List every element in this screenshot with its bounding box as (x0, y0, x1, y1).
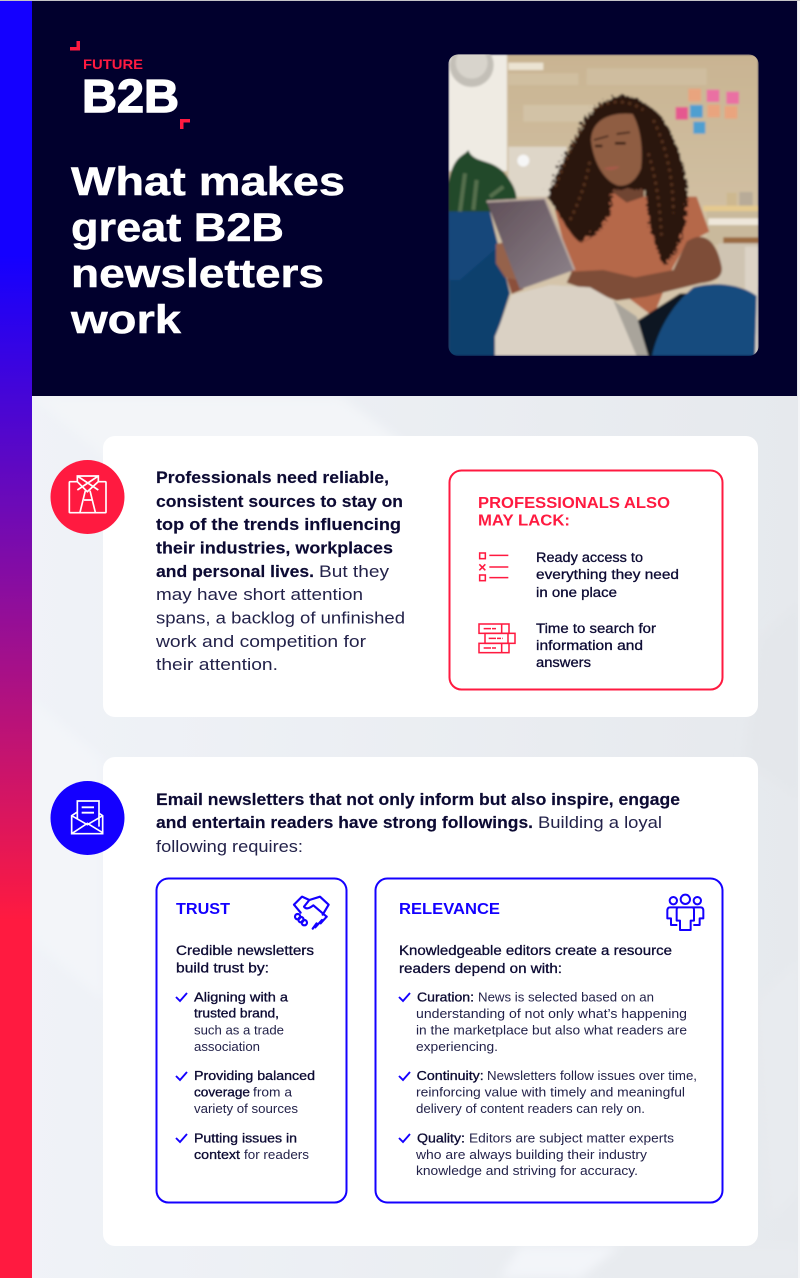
bullet: quality (399, 1132, 674, 1178)
bullet: continuity (399, 1069, 697, 1116)
callout: professionals also may lack (450, 470, 722, 690)
panel: trust: build trust by: (176, 961, 269, 976)
bullet: curation: understanding of not only what’s happening (416, 1007, 687, 1021)
text: time to search: information and (536, 638, 643, 653)
logo: Future B2B (70, 41, 190, 129)
text: time to search (536, 621, 657, 670)
icon: open envelope badge (50, 781, 124, 855)
text block: reliable sources: their industries, workplaces (156, 538, 393, 558)
bullet: continuity: reinforcing value with timely and meaningful (416, 1086, 685, 1100)
bullet: aligning with a trusted brand (176, 991, 288, 1054)
text block: reliable sources: work and competition for (155, 632, 366, 651)
bullet: putting issues in context: context (194, 1148, 241, 1162)
bullet: providing balanced coverage: Providing balanced (194, 1069, 315, 1083)
text: time to search: Time to search for (536, 621, 657, 636)
bullet: continuity: delivery of content readers can rely on. (416, 1102, 645, 1116)
text block: reliable sources: Professionals need reliable, (156, 468, 389, 487)
logo: Future B2B: B2B (82, 70, 179, 122)
text block: reliable sources: top of the trends influencing (156, 515, 401, 534)
panel: relevance: Knowledgeable editors create a resource (399, 943, 672, 958)
icon: shirt and tie badge (50, 460, 124, 534)
text block: reliable sources: and personal lives. (156, 562, 314, 581)
text block: reliable sources: consistent sources to stay on (156, 492, 403, 511)
text: ready access: in one place (536, 585, 617, 600)
bullet: putting issues in context: for readers (244, 1148, 309, 1162)
title: newsletters (71, 252, 324, 296)
bullet: putting issues in context (176, 1132, 309, 1162)
bullet: providing balanced coverage: from a (253, 1086, 292, 1100)
text: time to search: answers (536, 655, 591, 670)
bullet: curation (399, 991, 687, 1054)
icon: stacked files (479, 624, 515, 653)
bullet: aligning with a trusted brand: Aligning with a (194, 991, 288, 1005)
icon: group of people (667, 895, 703, 930)
photo: woman reading a tablet on a sofa (448, 43, 759, 356)
callout: professionals also may lack: MAY LACK: (478, 512, 570, 530)
bullet: aligning with a trusted brand: association (194, 1040, 260, 1054)
callout: professionals also may lack: PROFESSIONALS ALSO (478, 495, 670, 512)
text block: reliable sources: spans, a backlog of unfinished (156, 608, 405, 628)
bullet: providing balanced coverage (176, 1069, 315, 1116)
bullet: aligning with a trusted brand: trusted brand, (194, 1007, 279, 1021)
title (70, 160, 345, 342)
panel: trust (156, 878, 346, 1202)
panel: relevance: readers depend on with: (399, 961, 562, 976)
bullet: quality: knowledge and striving for accuracy. (416, 1164, 638, 1178)
bullet: quality: who are always building their industry (415, 1148, 648, 1162)
text block: reliable sources: But they (319, 562, 390, 581)
text block: reliable sources: may have short attention (156, 585, 363, 604)
text block: email newsletters: and entertain readers have strong followings. (156, 814, 533, 832)
panel: trust: TRUST (176, 901, 230, 918)
panel: professionals need reliable sources (50, 436, 758, 717)
text: ready access: Ready access to (536, 550, 643, 565)
title: What makes (71, 160, 345, 204)
left gradient bar (0, 0, 32, 1278)
header band (0, 0, 800, 396)
text block: reliable sources: their attention. (156, 655, 278, 674)
panel: email newsletters (50, 757, 758, 1246)
icon: checklist (479, 553, 508, 581)
bullet: curation: Curation: (417, 991, 474, 1005)
panel: relevance: RELEVANCE (399, 901, 500, 918)
bullet: continuity: Continuity: (417, 1069, 484, 1083)
text block: email newsletters (156, 791, 680, 856)
panel: trust: Credible newsletters (176, 943, 314, 958)
text block: email newsletters: Email newsletters that not only inform but also inspire, engage (156, 791, 680, 809)
bullet: continuity: Newsletters follow issues over time, (487, 1069, 697, 1083)
bullet: putting issues in context: Putting issues in (194, 1132, 297, 1146)
icon: handshake (294, 897, 329, 929)
title: great B2B (71, 206, 284, 250)
text block: email newsletters: Building a loyal (538, 814, 662, 832)
bullet: curation: experiencing. (416, 1040, 498, 1054)
bullet: curation: News is selected based on an (478, 991, 654, 1005)
title: work (70, 298, 182, 342)
bullet: providing balanced coverage: variety of sources (194, 1102, 298, 1116)
text: ready access (536, 550, 679, 600)
bullet: providing balanced coverage: coverage (194, 1086, 250, 1100)
bullet: aligning with a trusted brand: such as a trade (194, 1024, 284, 1038)
logo: Future B2B: FUTURE (83, 56, 143, 72)
bullet: curation: in the marketplace but also what readers are (416, 1024, 687, 1038)
text: ready access: everything they need (536, 567, 679, 582)
text block: reliable sources (155, 468, 405, 674)
bullet: quality: Editors are subject matter experts (469, 1132, 674, 1146)
text block: email newsletters: following requires: (156, 838, 303, 856)
panel: relevance (376, 878, 722, 1202)
bullet: quality: Quality: (417, 1132, 465, 1146)
